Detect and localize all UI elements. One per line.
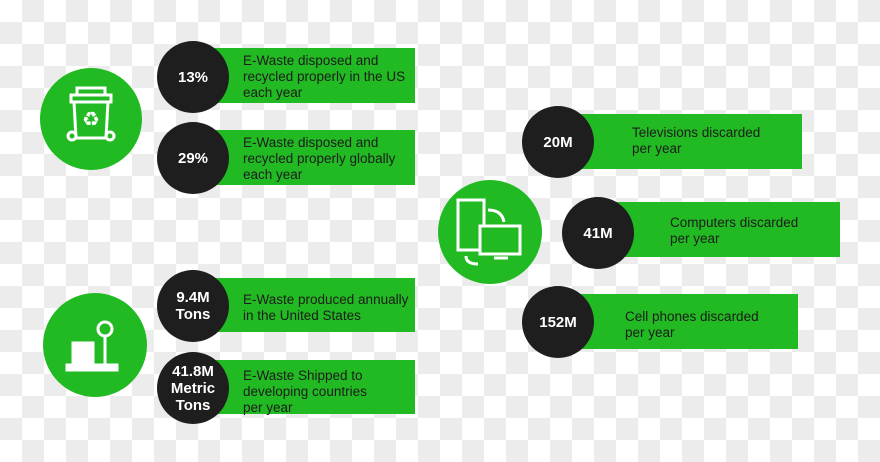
text: E-Waste Shipped to [243,368,363,383]
text: per year [243,400,293,415]
text: E-Waste disposed and [243,53,378,68]
text: E-Waste disposed and [243,135,378,150]
text: Computers discarded [670,215,798,230]
text: Tons [176,396,210,414]
text: in the United States [243,308,361,323]
panel: 9.4M [157,270,415,342]
text: 41.8M [172,362,214,380]
panel: 13% [157,41,415,113]
text: E-Waste produced annually [243,292,408,307]
icon: recycle bin [40,68,142,170]
text: per year [632,141,682,156]
panel: 20M [522,106,802,178]
text: 20M [543,134,573,150]
icon: scale [43,293,147,397]
text: recycled properly globally [243,151,395,166]
text: 29% [178,150,208,166]
text: recycled properly in the US [243,69,405,84]
text: 13% [178,68,208,86]
text: Cell phones discarded [625,309,759,324]
text: 152M [539,314,577,330]
text: 9.4M [176,289,210,306]
text: per year [625,325,675,340]
text: Tons [176,306,210,323]
panel: 29% [157,122,415,194]
panel: 152M [522,286,798,358]
text: each year [243,85,302,100]
text: Metric [171,380,215,396]
icon: recycle bin: ♻ [82,109,100,131]
icon: computer [438,180,542,284]
text: per year [670,231,720,246]
panel: 41.8M [157,352,415,424]
panel: 41M [562,197,840,269]
text: each year [243,167,302,182]
text: 41M [583,224,613,242]
text: developing countries [243,384,367,399]
text: Televisions discarded [632,125,760,140]
